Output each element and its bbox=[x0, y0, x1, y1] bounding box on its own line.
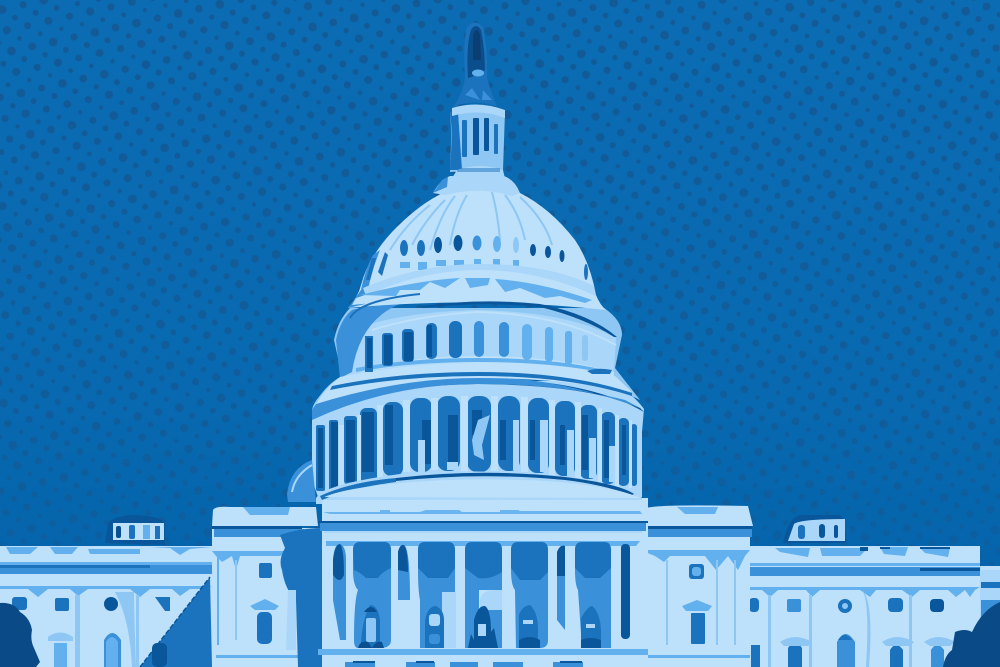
dome: rotunda colonnade bbox=[287, 376, 645, 510]
dark shadow in openings bbox=[318, 405, 626, 490]
dome ribs bbox=[390, 192, 552, 250]
colonnade openings bbox=[316, 396, 637, 492]
central portico bbox=[318, 498, 648, 667]
left pavilion bbox=[212, 507, 326, 667]
portico openings bbox=[333, 542, 630, 648]
tree: bottom left bbox=[0, 603, 40, 667]
right wing of building bbox=[748, 515, 1000, 667]
rotunda base bbox=[316, 471, 642, 504]
tree: bottom right bbox=[943, 602, 1000, 667]
dome: upper drum bbox=[314, 304, 640, 405]
light columns in openings bbox=[339, 396, 632, 490]
upper dark shading in openings bbox=[353, 542, 611, 580]
drum windows bbox=[365, 321, 462, 372]
statues and doors bbox=[358, 605, 601, 648]
dome: lantern and spire bbox=[433, 22, 520, 196]
dome: shell with ribs and oculi bbox=[348, 187, 617, 337]
dome oculi bbox=[366, 235, 588, 280]
right pavilion bbox=[640, 505, 753, 667]
left wing of building bbox=[0, 515, 212, 667]
